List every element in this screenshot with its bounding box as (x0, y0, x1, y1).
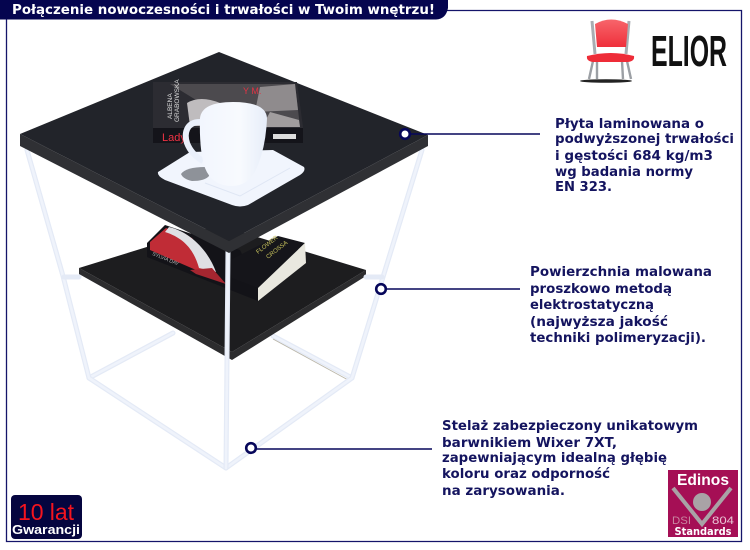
book on table top: ALBENA (167, 93, 174, 119)
text block: frame finish (442, 419, 698, 499)
text block: frame finish: zapewniającym idealną głębię (442, 451, 667, 466)
badge: Edinos Standards (668, 470, 738, 538)
product: table with two shelves (20, 52, 428, 468)
book on table top (153, 79, 303, 144)
badge: 10 years warranty (11, 495, 82, 539)
header banner: Połączenie nowoczesności i trwałości w Twoim wnętrzu! (12, 3, 435, 18)
books on lower shelf (147, 225, 306, 301)
cup (186, 102, 267, 186)
badge: 10 years warranty: 10 lat (18, 499, 75, 525)
icon: red chair (580, 20, 634, 83)
lower shelf (79, 225, 366, 360)
callout: powder coating (376, 284, 520, 294)
table top (20, 52, 428, 253)
text block: top plate: i gęstości 684 kg/m3 (555, 149, 713, 164)
text block: top plate: Płyta laminowana o (555, 117, 704, 132)
text block: powder coating (530, 265, 712, 346)
text block: powder coating: Powierzchnia malowana (530, 265, 712, 280)
text block: powder coating: proszkowo metodą (530, 282, 672, 297)
badge: Edinos Standards: DSI (672, 515, 691, 527)
text block: top plate: EN 323. (555, 180, 612, 195)
spoon (181, 167, 210, 181)
books on lower shelf: CROSSA (266, 240, 289, 261)
badge: 10 years warranty: Gwarancji (12, 523, 80, 537)
book on table top: GRABOWSKA (174, 79, 181, 122)
text block: frame finish: koloru oraz odporność (442, 467, 610, 482)
text block: top plate (555, 117, 734, 195)
badge: Edinos Standards: 804 (712, 515, 734, 527)
plate (158, 150, 304, 206)
badge: Edinos Standards: Standards (674, 525, 732, 538)
logo: Elior (580, 20, 727, 83)
text block: frame finish: Stelaż zabezpieczony unikatowym (442, 419, 698, 434)
second book (226, 236, 305, 288)
text block: powder coating: elektrostatyczną (530, 298, 654, 313)
books on lower shelf: FLOWER (256, 235, 280, 256)
table frame legs (27, 150, 422, 468)
text block: frame finish: na zarysowania. (442, 484, 565, 499)
callout: frame finish (246, 443, 432, 453)
black book (147, 225, 258, 301)
text block: top plate: podwyższonej trwałości (555, 132, 734, 147)
text block: powder coating: (najwyższa jakość (530, 315, 668, 330)
table frame back rails (89, 333, 352, 381)
text block: powder coating: techniki polimeryzacji). (530, 331, 706, 346)
text block: frame finish: barwnikiem Wixer 7XT, (442, 436, 617, 451)
badge: Edinos Standards: Edinos (677, 472, 729, 489)
book on table top: Y M. (243, 86, 261, 96)
books on lower shelf: SYLVIA DAY (151, 251, 180, 268)
callout: top plate (400, 129, 540, 139)
text block: top plate: wg badania normy (555, 165, 694, 180)
book on table top: Lady (162, 132, 186, 144)
